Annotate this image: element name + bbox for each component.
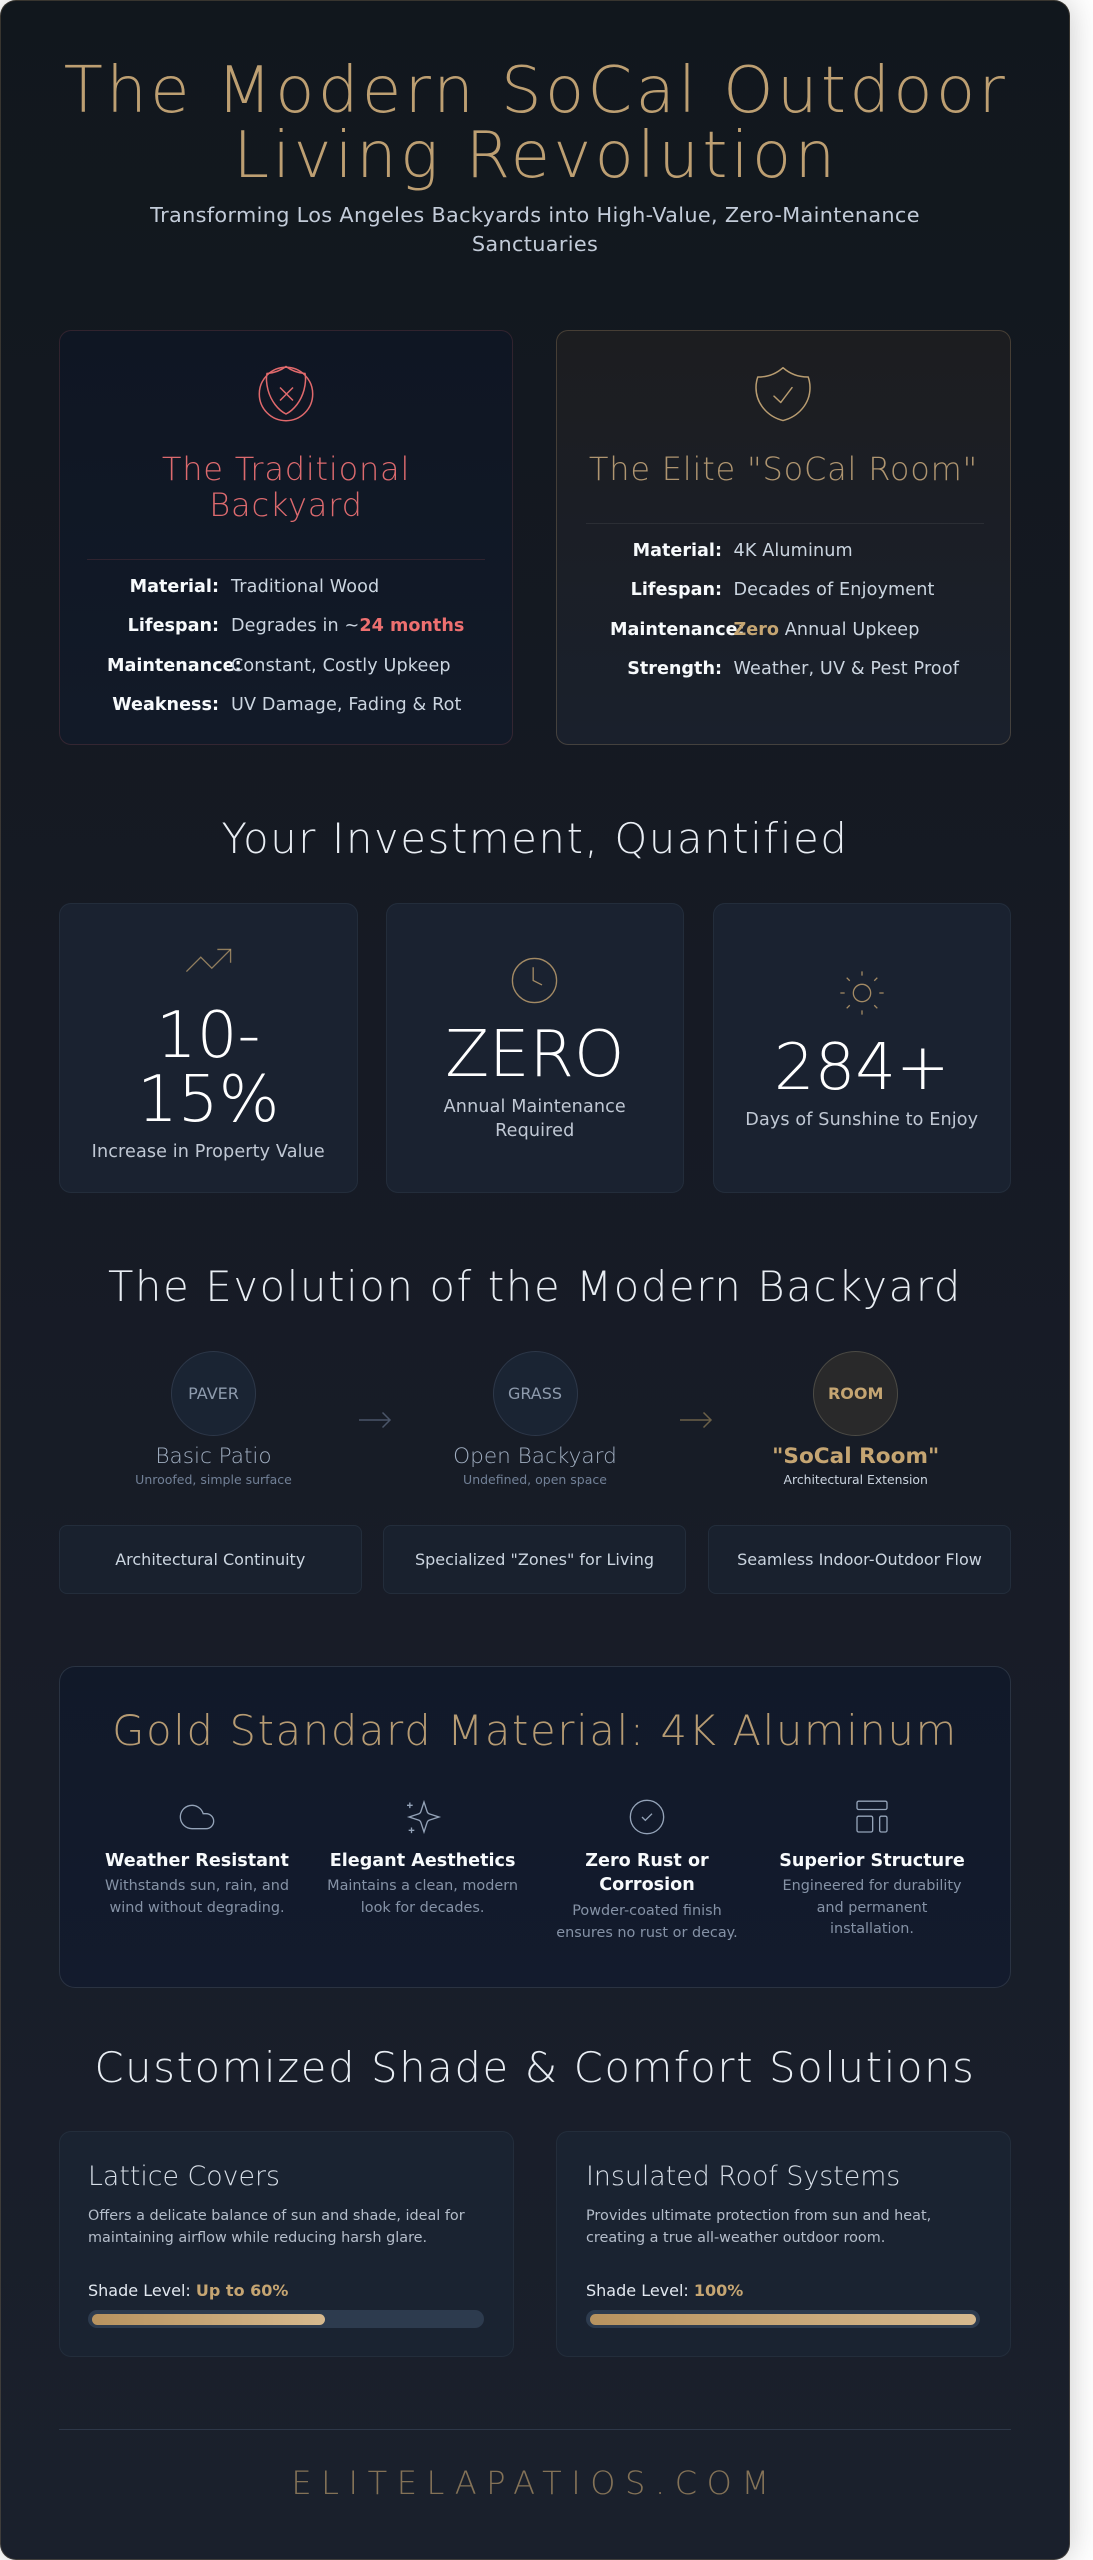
subtitle: Sanctuaries <box>472 232 598 256</box>
panel: traditional backyard <box>59 330 513 745</box>
panel: elite socal room <box>556 330 1011 745</box>
spec: lifespan: Decades of Enjoyment <box>734 580 935 600</box>
solution description: maintaining airflow while reducing harsh glare. <box>88 2230 427 2246</box>
stat label: Days of Sunshine to Enjoy <box>745 1110 978 1130</box>
spec: weakness: UV Damage, Fading & Rot <box>231 695 462 715</box>
icon: layout <box>856 1800 888 1833</box>
feature box: zones <box>383 1525 686 1594</box>
arrow: patio to backyard <box>359 1412 391 1428</box>
solution description: Provides ultimate protection from sun and heat, <box>586 2208 931 2224</box>
panel: lattice covers <box>59 2131 514 2357</box>
icon: room circle <box>813 1350 898 1436</box>
icon: cloud <box>180 1804 214 1830</box>
feature description: Maintains a clean, modern <box>327 1878 518 1894</box>
step name: Open Backyard <box>453 1444 617 1468</box>
feature: superior structure <box>779 1800 965 1937</box>
icon: grass circle <box>492 1350 578 1436</box>
feature description: and permanent <box>817 1900 927 1916</box>
stat value: 10- <box>156 999 261 1073</box>
spec: lifespan: Degrades in ~24 months <box>231 616 464 636</box>
subtitle: Transforming Los Angeles Backyards into High-Value, Zero-Maintenance <box>150 203 920 227</box>
panel: gold standard material <box>59 1666 1011 1988</box>
step name: Basic Patio <box>155 1444 272 1468</box>
solution title: Insulated Roof Systems <box>586 2161 900 2192</box>
step description: Undefined, open space <box>463 1472 607 1487</box>
icon: check circle <box>630 1800 664 1834</box>
feature description: wind without degrading. <box>109 1900 285 1916</box>
icon: paver circle <box>171 1350 256 1436</box>
stat label: Annual Maintenance <box>444 1097 626 1117</box>
stat value: ZERO <box>445 1018 624 1092</box>
spec: strength <box>627 659 960 679</box>
spec: maintenance <box>107 656 451 676</box>
shade level label: Shade Level: Up to 60% <box>88 2280 288 2300</box>
panel: property value stat <box>59 903 358 1193</box>
feature: elegant aesthetics <box>327 1800 518 1916</box>
feature description: look for decades. <box>361 1900 484 1916</box>
heading: evolution: The Evolution of the Modern Backyard <box>108 1262 962 1311</box>
spec: material: 4K Aluminum <box>734 541 853 561</box>
panel: insulated roof systems <box>556 2131 1011 2357</box>
icon: clock <box>512 958 558 1004</box>
title: Living Revolution <box>233 118 839 192</box>
feature description <box>105 1878 289 1916</box>
solution description: Offers a delicate balance of sun and shade, ideal for <box>88 2208 465 2224</box>
feature title <box>585 1851 709 1895</box>
spec: material <box>130 577 379 597</box>
arrow: backyard to socal room <box>680 1412 712 1428</box>
panel: sunshine stat <box>712 903 1011 1193</box>
feature title: Elegant Aesthetics <box>330 1851 515 1871</box>
step: socal room <box>772 1351 939 1487</box>
progress bar: 60 percent <box>88 2310 484 2328</box>
spec: lifespan <box>128 616 464 636</box>
stat value: 284+ <box>774 1031 950 1105</box>
step name: "SoCal Room" <box>772 1444 939 1468</box>
spec: lifespan: Lifespan: <box>128 616 219 636</box>
feature description: ensures no rust or decay. <box>556 1925 738 1941</box>
step: open backyard <box>453 1351 617 1487</box>
feature description: Powder-coated finish <box>572 1903 722 1919</box>
spec: material: Material: <box>130 577 219 597</box>
feature description <box>556 1903 738 1941</box>
feature description <box>327 1878 518 1916</box>
icon: paver circle: PAVER <box>188 1384 239 1402</box>
spec: material: Traditional Wood <box>231 577 379 597</box>
solution description <box>88 2208 465 2246</box>
feature title: Corrosion <box>599 1875 695 1895</box>
spec: maintenance: Maintenance: <box>610 620 745 640</box>
feature title: Weather Resistant <box>105 1851 289 1871</box>
icon: sparkles <box>407 1800 441 1834</box>
feature box: flow <box>708 1525 1011 1594</box>
feature description: Withstands sun, rain, and <box>105 1878 289 1894</box>
solution description: creating a true all-weather outdoor room. <box>586 2230 885 2246</box>
spec: material <box>633 541 853 561</box>
stat label: Increase in Property Value <box>92 1142 325 1162</box>
spec: lifespan <box>631 580 935 600</box>
spec: lifespan: Lifespan: <box>631 580 722 600</box>
heading: investment: Your Investment, Quantified <box>222 814 848 863</box>
feature title: Zero Rust or <box>585 1851 709 1871</box>
heading: elite socal room: The Elite "SoCal Room" <box>589 450 978 488</box>
stat value <box>137 999 279 1137</box>
spec: weakness <box>112 695 462 715</box>
icon: shield with x <box>258 366 314 422</box>
heading: traditional backyard <box>162 450 410 524</box>
heading: traditional backyard: The Traditional <box>162 450 410 488</box>
feature box: zones: Specialized "Zones" for Living <box>415 1550 654 1569</box>
spec: maintenance: Maintenance: <box>107 656 242 676</box>
title <box>64 54 1008 192</box>
spec: strength: Weather, UV & Pest Proof <box>734 659 959 679</box>
footer: website: ELITELAPATIOS.COM <box>291 2464 779 2502</box>
title: The Modern SoCal Outdoor <box>64 54 1008 128</box>
spec: weakness: Weakness: <box>112 695 219 715</box>
panel: zero maintenance stat <box>386 903 684 1193</box>
icon: grass circle: GRASS <box>508 1384 562 1402</box>
solution description <box>586 2208 931 2246</box>
progress bar: 100 percent <box>586 2310 980 2328</box>
icon: shield with check <box>755 367 811 422</box>
heading: shade solutions: Customized Shade & Comfort Solutions <box>94 2043 976 2092</box>
feature: zero rust <box>556 1800 738 1941</box>
feature description: Engineered for durability <box>782 1878 961 1894</box>
stat label: Required <box>495 1121 574 1141</box>
stat value: 15% <box>137 1063 279 1137</box>
spec: strength: Strength: <box>627 659 722 679</box>
step description: Architectural Extension <box>784 1472 928 1487</box>
feature description <box>782 1878 961 1937</box>
feature box: continuity <box>59 1525 362 1594</box>
feature description: installation. <box>830 1921 914 1937</box>
solution title: Lattice Covers <box>88 2161 280 2192</box>
stat label <box>444 1097 626 1141</box>
heading: traditional backyard: Backyard <box>209 486 363 524</box>
spec: maintenance: Constant, Costly Upkeep <box>231 656 451 676</box>
feature title: Superior Structure <box>779 1851 965 1871</box>
feature box: flow: Seamless Indoor-Outdoor Flow <box>737 1550 982 1569</box>
feature box: continuity: Architectural Continuity <box>115 1550 305 1569</box>
spec: maintenance <box>610 620 920 640</box>
step description: Unroofed, simple surface <box>135 1472 292 1487</box>
icon: trending up <box>186 948 232 972</box>
feature: weather resistant <box>105 1804 289 1916</box>
shade level label: Shade Level: 100% <box>586 2280 743 2300</box>
subtitle <box>150 203 920 256</box>
heading: gold standard: Gold Standard Material: 4K Aluminum <box>112 1706 958 1755</box>
icon: room circle: ROOM <box>828 1384 883 1402</box>
spec: maintenance: Zero Annual Upkeep <box>734 620 920 640</box>
icon: sun <box>840 971 884 1015</box>
spec: material: Material: <box>633 541 722 561</box>
step: basic patio <box>135 1351 292 1487</box>
